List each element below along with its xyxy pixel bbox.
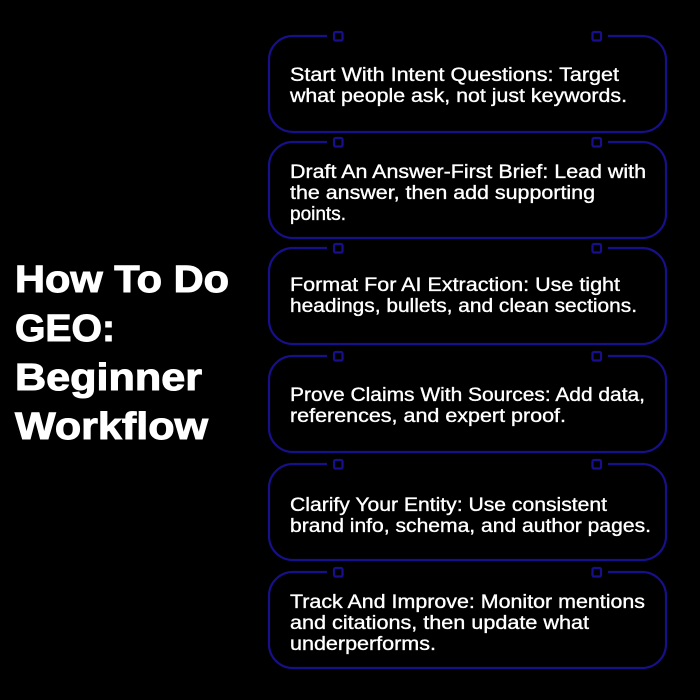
title: How To Do — [15, 259, 229, 301]
panel: step 5 clarify your entity: brand info, schema, and author pages. — [290, 516, 651, 537]
panel: step 6 track and improve: underperforms. — [290, 634, 436, 655]
title: Beginner — [15, 357, 202, 399]
panel: step 4 prove claims with sources: references, and expert proof. — [290, 406, 566, 427]
panel: step 3 format for ai extraction: Format For AI Extraction: Use tight — [290, 275, 621, 296]
panel: step 6 track and improve: and citations, then update what — [290, 613, 590, 634]
panel: step 1 start with intent questions — [269, 32, 666, 132]
panel: step 6 track and improve — [269, 568, 666, 668]
panel: step 1 start with intent questions: what people ask, not just keywords. — [289, 86, 627, 107]
panel: step 3 format for ai extraction: headings, bullets, and clean sections. — [290, 296, 637, 317]
title: Workflow — [15, 406, 208, 448]
panel: step 5 clarify your entity — [269, 460, 666, 560]
panel: step 4 prove claims with sources: Prove Claims With Sources: Add data, — [290, 385, 645, 406]
panel: step 5 clarify your entity: Clarify Your Entity: Use consistent — [290, 495, 608, 516]
title — [15, 259, 229, 448]
title: GEO: — [15, 308, 115, 350]
panel: step 2 draft an answer-first brief: the answer, then add supporting — [290, 183, 595, 204]
panel: step 2 draft an answer-first brief: points. — [290, 204, 346, 225]
panel: step 6 track and improve: Track And Improve: Monitor mentions — [290, 592, 645, 613]
panel: step 2 draft an answer-first brief — [269, 138, 666, 238]
panel: step 3 format for ai extraction — [269, 244, 666, 344]
panel: step 2 draft an answer-first brief: Draft An Answer-First Brief: Lead with — [290, 162, 646, 183]
panel: step 4 prove claims with sources — [269, 352, 666, 452]
panel: step 1 start with intent questions: Start With Intent Questions: Target — [290, 65, 620, 86]
